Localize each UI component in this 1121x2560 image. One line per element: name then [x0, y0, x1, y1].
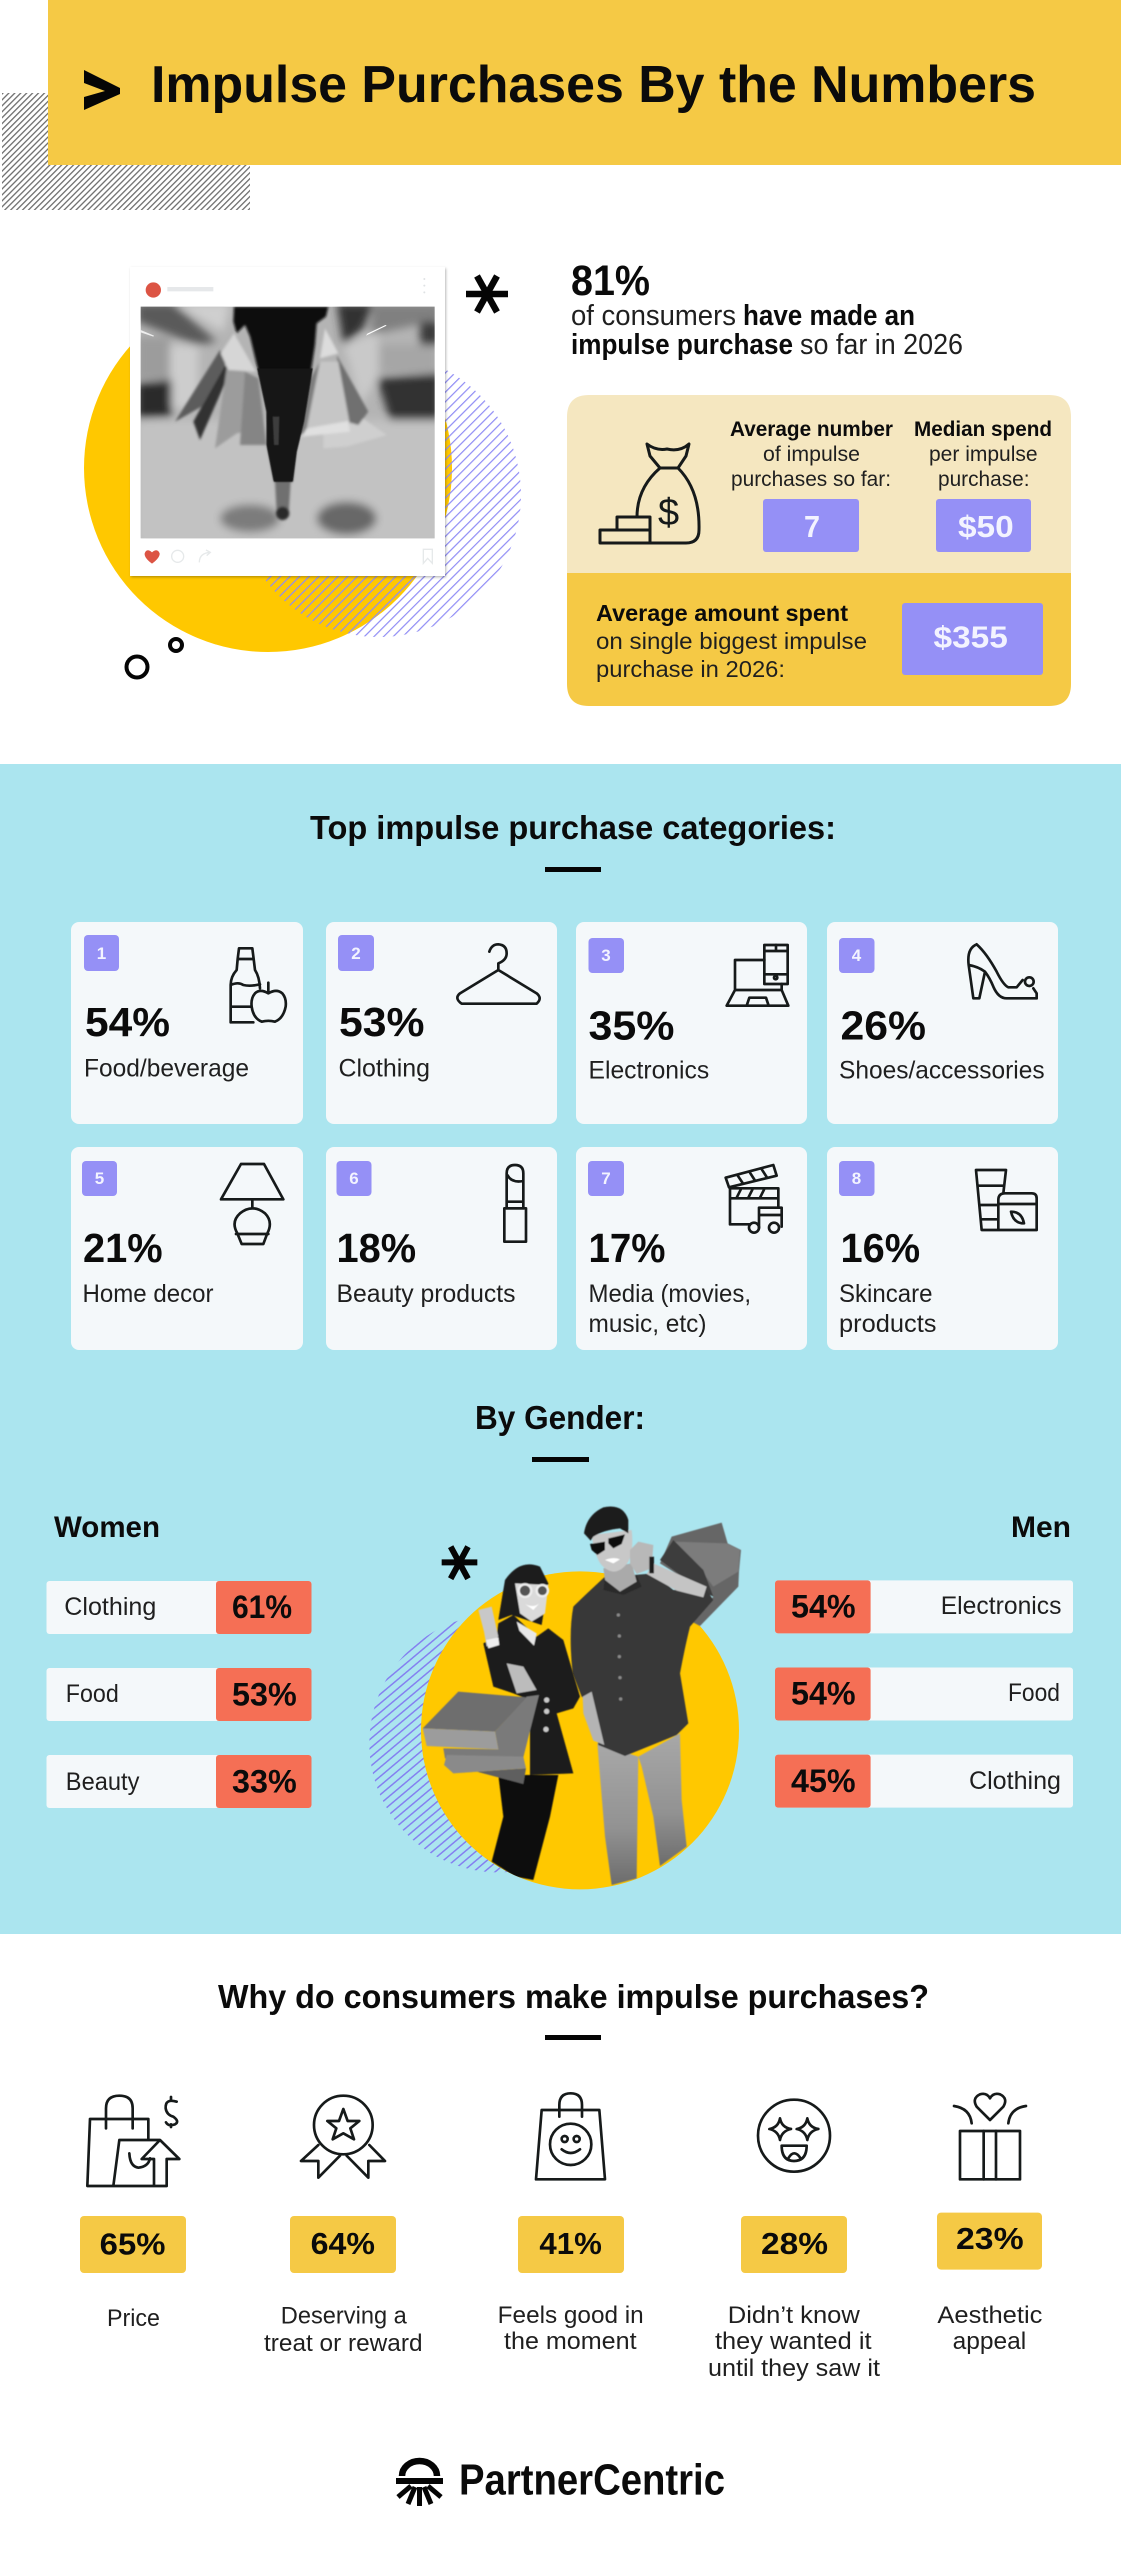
icon: devices: [727, 945, 788, 1006]
card: shoes: 4: [852, 946, 862, 965]
reason: did not know: they wanted it: [715, 2328, 872, 2355]
heading: categories: Top impulse purchase categories:: [310, 809, 836, 846]
reason: aesthetic appeal: 23%: [956, 2221, 1024, 2256]
stat: median spend: [914, 418, 1052, 552]
icon: gift with heart: [954, 2094, 1026, 2179]
stat: average number: [730, 418, 893, 552]
reason: treat: 64%: [311, 2226, 375, 2261]
icon: chevron: [84, 70, 120, 110]
heading: why: [218, 1978, 929, 2040]
card: food and beverage: 54%: [85, 999, 170, 1045]
card: home decor: Home decor: [82, 1280, 214, 1308]
bar: men clothing: Clothing: [969, 1767, 1061, 1795]
card: electronics: Electronics: [588, 1056, 709, 1084]
card: media: music, etc): [588, 1310, 706, 1338]
card: skincare: products: [839, 1310, 936, 1338]
bar: women food: 53%: [232, 1676, 297, 1712]
icon: small circles: [126, 639, 182, 678]
bar: women beauty: [46, 1755, 312, 1808]
card: media: 7: [601, 1169, 611, 1188]
reason: did not know: Didn’t know: [728, 2302, 861, 2329]
panel: women: Women: [54, 1511, 160, 1544]
reason: feels good: the moment: [504, 2328, 637, 2355]
stat: 81 percent: have made an: [743, 300, 915, 332]
icon: asterisk: [466, 276, 508, 312]
heading: why: Why do consumers make impulse purchases?: [218, 1978, 929, 2015]
card: food and beverage: Food/beverage: [84, 1054, 249, 1082]
card: beauty: [326, 1147, 557, 1350]
bar: men food: [775, 1668, 1073, 1720]
bar: women food: [46, 1668, 312, 1721]
panel: blue section: [0, 764, 1121, 1934]
card: skincare: 8: [852, 1169, 861, 1188]
icon: asterisk: [442, 1547, 477, 1579]
stat: average number: 7: [804, 509, 820, 544]
reason: treat: Deserving a: [281, 2302, 407, 2330]
illustration: couple with shopping bags: [369, 1507, 741, 1889]
stat: average number: of impulse: [763, 443, 860, 466]
card: skincare: 16%: [840, 1225, 920, 1271]
bar: women beauty: 33%: [232, 1764, 297, 1800]
header banner: [48, 0, 1121, 165]
card: home decor: 5: [95, 1169, 104, 1188]
stat: average number: purchases so far:: [731, 468, 891, 491]
panel: men: [775, 1511, 1073, 1808]
reason: did not know: until they saw it: [708, 2355, 880, 2382]
post card: [130, 267, 445, 576]
title: Impulse Purchases By the Numbers: [151, 56, 1036, 114]
icon: smiling bag: [536, 2093, 605, 2179]
card: home decor: 21%: [83, 1225, 163, 1271]
icon: clapperboard and notes: [726, 1165, 782, 1233]
reason: did not know: [708, 2100, 880, 2382]
bar: men electronics: [775, 1580, 1073, 1633]
stat: 81 percent: [571, 257, 963, 361]
bar: men clothing: 45%: [791, 1763, 856, 1799]
card: shoes: Shoes/accessories: [839, 1056, 1045, 1084]
man: [571, 1507, 741, 1885]
card: shoes: [827, 922, 1058, 1124]
stat: 81 percent: of consumers: [571, 300, 736, 332]
icon: logo mark: [396, 2461, 443, 2506]
panel: men: Men: [1011, 1511, 1071, 1544]
reason: did not know: 28%: [761, 2226, 828, 2261]
stat: biggest purchase: $355: [934, 620, 1008, 654]
reason: feels good: Feels good in: [498, 2302, 644, 2329]
icon: money bag: [600, 444, 699, 543]
reason: feels good: [498, 2093, 644, 2355]
reason: price: Price: [107, 2305, 160, 2332]
bar: women beauty: Beauty: [66, 1768, 140, 1796]
bar: women food: Food: [66, 1680, 119, 1708]
card: food and beverage: 1: [97, 944, 106, 963]
icon: bag with arrow: [87, 2096, 179, 2186]
stat: median spend: per impulse: [929, 443, 1038, 466]
card: clothing: 2: [351, 944, 361, 963]
stat: biggest purchase: purchase in 2026:: [596, 656, 785, 682]
stat: median spend: purchase:: [938, 468, 1030, 491]
illustration: social post over circles: [84, 267, 521, 678]
bar: women clothing: 61%: [232, 1589, 292, 1625]
bar: men food: 54%: [791, 1676, 856, 1712]
bar: men clothing: [775, 1755, 1073, 1808]
icon: bottle and apple: [231, 948, 286, 1022]
card: skincare: [827, 1147, 1058, 1350]
heading: by gender: [475, 1399, 645, 1462]
hatched corner decoration: [2, 93, 250, 210]
stat: median spend: Median spend: [914, 418, 1052, 441]
stat: 81 percent: impulse purchase: [571, 329, 793, 361]
icon: award ribbon: [301, 2096, 385, 2178]
bar: men electronics: 54%: [791, 1589, 856, 1625]
bar: women clothing: Clothing: [64, 1593, 156, 1621]
card: electronics: 35%: [588, 1002, 674, 1048]
card: beauty: 6: [349, 1169, 359, 1188]
reason: feels good: 41%: [539, 2226, 602, 2261]
bar: women clothing: [46, 1581, 312, 1634]
heading: categories: [310, 809, 836, 872]
stat: biggest purchase: Average amount spent: [596, 600, 848, 626]
card: clothing: [326, 922, 557, 1124]
card: shoes: 26%: [840, 1002, 926, 1048]
card: electronics: [576, 922, 807, 1124]
stat: 81 percent: so far in 2026: [800, 329, 963, 361]
card: media: [576, 1147, 807, 1350]
card: skincare: Skincare: [839, 1280, 932, 1308]
icon: high heel: [968, 944, 1037, 998]
reason: price: [80, 2096, 186, 2332]
card: food and beverage: [71, 922, 303, 1124]
card: clothing: Clothing: [338, 1054, 430, 1082]
card: media: 17%: [588, 1225, 666, 1271]
icon: lamp: [221, 1164, 283, 1244]
stat: 81 percent: 81%: [571, 257, 650, 305]
bar: men food: Food: [1008, 1679, 1060, 1707]
icon: lipstick: [504, 1165, 526, 1242]
reason: aesthetic appeal: [937, 2094, 1042, 2355]
photo: woman with shopping bags: [137, 303, 440, 543]
icon: hanger: [457, 944, 540, 1004]
panel: women: [46, 1511, 312, 1808]
card: home decor: [71, 1147, 303, 1350]
card: clothing: 53%: [339, 999, 424, 1045]
reason: treat: [264, 2096, 422, 2357]
logo: PartnerCentric: PartnerCentric: [459, 2456, 725, 2505]
stat: median spend: $50: [958, 509, 1014, 544]
stat: average number: Average number: [730, 418, 893, 441]
card: electronics: 3: [601, 946, 611, 965]
stat: biggest purchase: [596, 600, 1043, 682]
reason: aesthetic appeal: appeal: [953, 2328, 1026, 2355]
reason: aesthetic appeal: Aesthetic: [937, 2302, 1042, 2329]
reason: treat: treat or reward: [264, 2330, 422, 2357]
icon: money bag: $: [658, 492, 679, 534]
heading: by gender: By Gender:: [475, 1399, 645, 1436]
panel: spending stats: [567, 395, 1071, 706]
icon: starry-eyed face: [758, 2100, 830, 2172]
reason: price: 65%: [100, 2227, 165, 2262]
shopping bags: [423, 1692, 539, 1784]
card: beauty: 18%: [336, 1225, 416, 1271]
stat: biggest purchase: on single biggest impulse: [596, 628, 867, 654]
bar: men electronics: Electronics: [941, 1592, 1062, 1620]
woman: [423, 1564, 580, 1880]
card: beauty: Beauty products: [336, 1280, 516, 1308]
card: media: Media (movies,: [588, 1280, 751, 1308]
icon: skincare products: [976, 1170, 1037, 1230]
